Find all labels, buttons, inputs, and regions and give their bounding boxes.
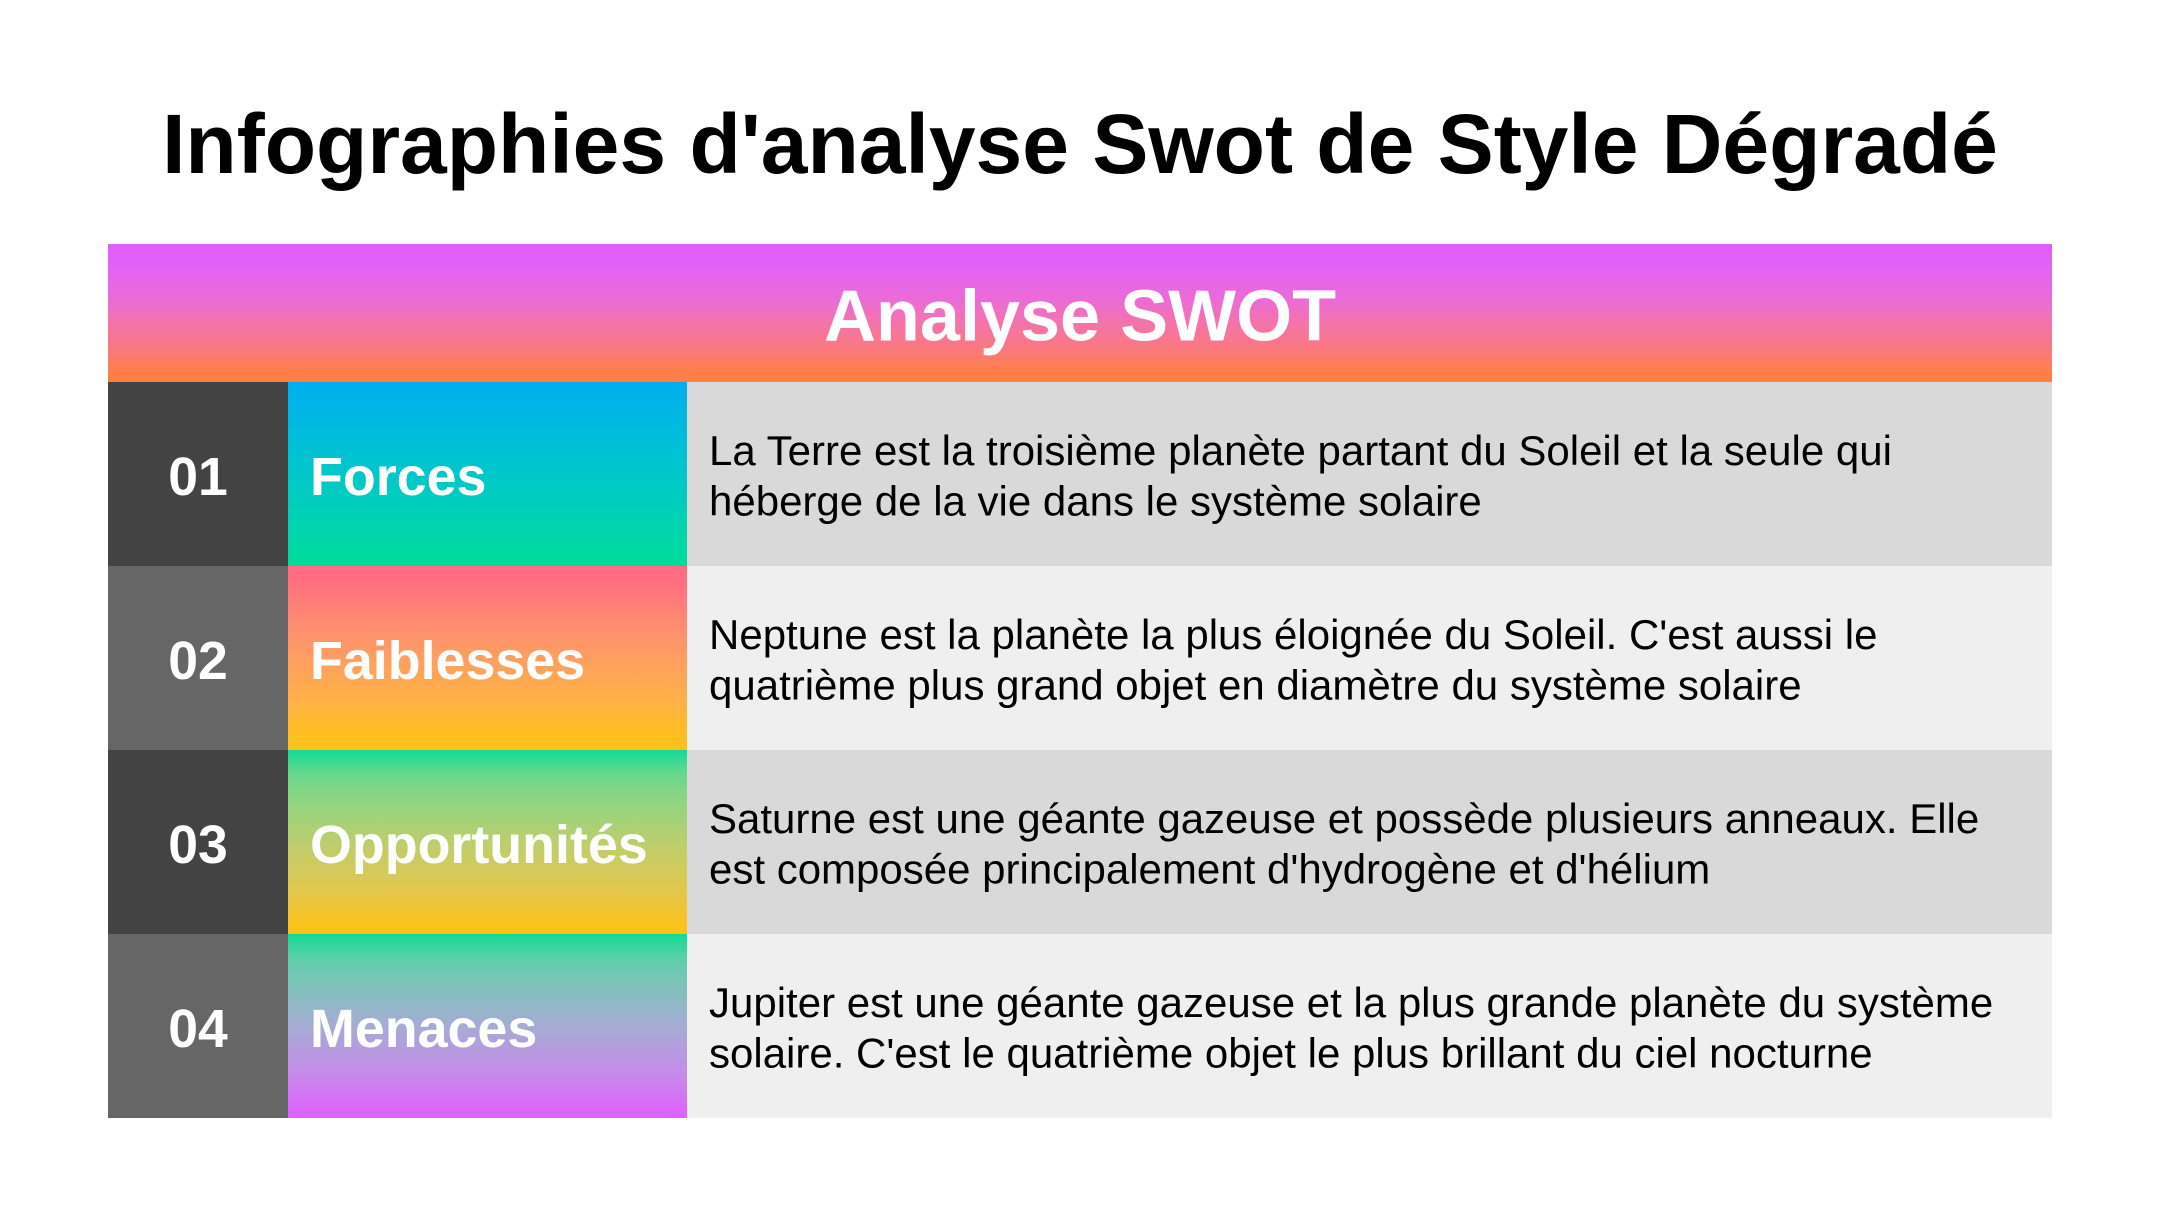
- panel: row 04 Menaces: [108, 934, 2052, 1118]
- description: Menaces: Jupiter est une géante gazeuse et la plus grande planète du système: [709, 979, 1993, 1026]
- description: Faiblesses: quatrième plus grand objet en diamètre du système solaire: [709, 662, 1802, 708]
- number 01: [108, 382, 288, 566]
- description: Faiblesses: [687, 566, 2052, 750]
- number 02: 02: [168, 632, 228, 691]
- number 02: [108, 566, 288, 750]
- panel: row 01 Forces: [108, 382, 2052, 566]
- title: Infographies d'analyse Swot de Style Dégradé: [162, 97, 1998, 191]
- label: Opportunités: [288, 750, 687, 934]
- number 04: 04: [168, 1000, 228, 1059]
- number 03: 03: [168, 816, 228, 875]
- description: Forces: héberge de la vie dans le système solaire: [709, 478, 1482, 524]
- label: Faiblesses: [288, 566, 687, 750]
- label: Forces: Forces: [310, 447, 486, 507]
- label: Opportunités: Opportunités: [310, 815, 648, 875]
- label: Menaces: [288, 934, 687, 1118]
- description: Menaces: [687, 934, 2052, 1118]
- number 03: [108, 750, 288, 934]
- panel: row 03 Opportunités: [108, 750, 2052, 934]
- label: Faiblesses: Faiblesses: [310, 631, 585, 691]
- panel: row 02 Faiblesses: [108, 566, 2052, 750]
- description: Opportunités: [687, 750, 2052, 934]
- label: Forces: [288, 382, 687, 566]
- panel: header banner: Analyse SWOT: [824, 276, 1336, 356]
- number 01: 01: [168, 448, 228, 507]
- description: Opportunités: est composée principalement d'hydrogène et d'hélium: [709, 846, 1710, 892]
- description: Menaces: solaire. C'est le quatrième objet le plus brillant du ciel nocturne: [709, 1030, 1873, 1076]
- number 04: [108, 934, 288, 1118]
- description: Forces: [687, 382, 2052, 566]
- panel: header banner: [108, 244, 2052, 382]
- description: Faiblesses: Neptune est la planète la plus éloignée du Soleil. C'est aussi le: [709, 611, 1877, 658]
- description: Forces: La Terre est la troisième planète partant du Soleil et la seule qui: [709, 427, 1892, 474]
- label: Menaces: Menaces: [310, 999, 537, 1059]
- description: Opportunités: Saturne est une géante gazeuse et possède plusieurs anneaux. Elle: [709, 795, 1979, 842]
